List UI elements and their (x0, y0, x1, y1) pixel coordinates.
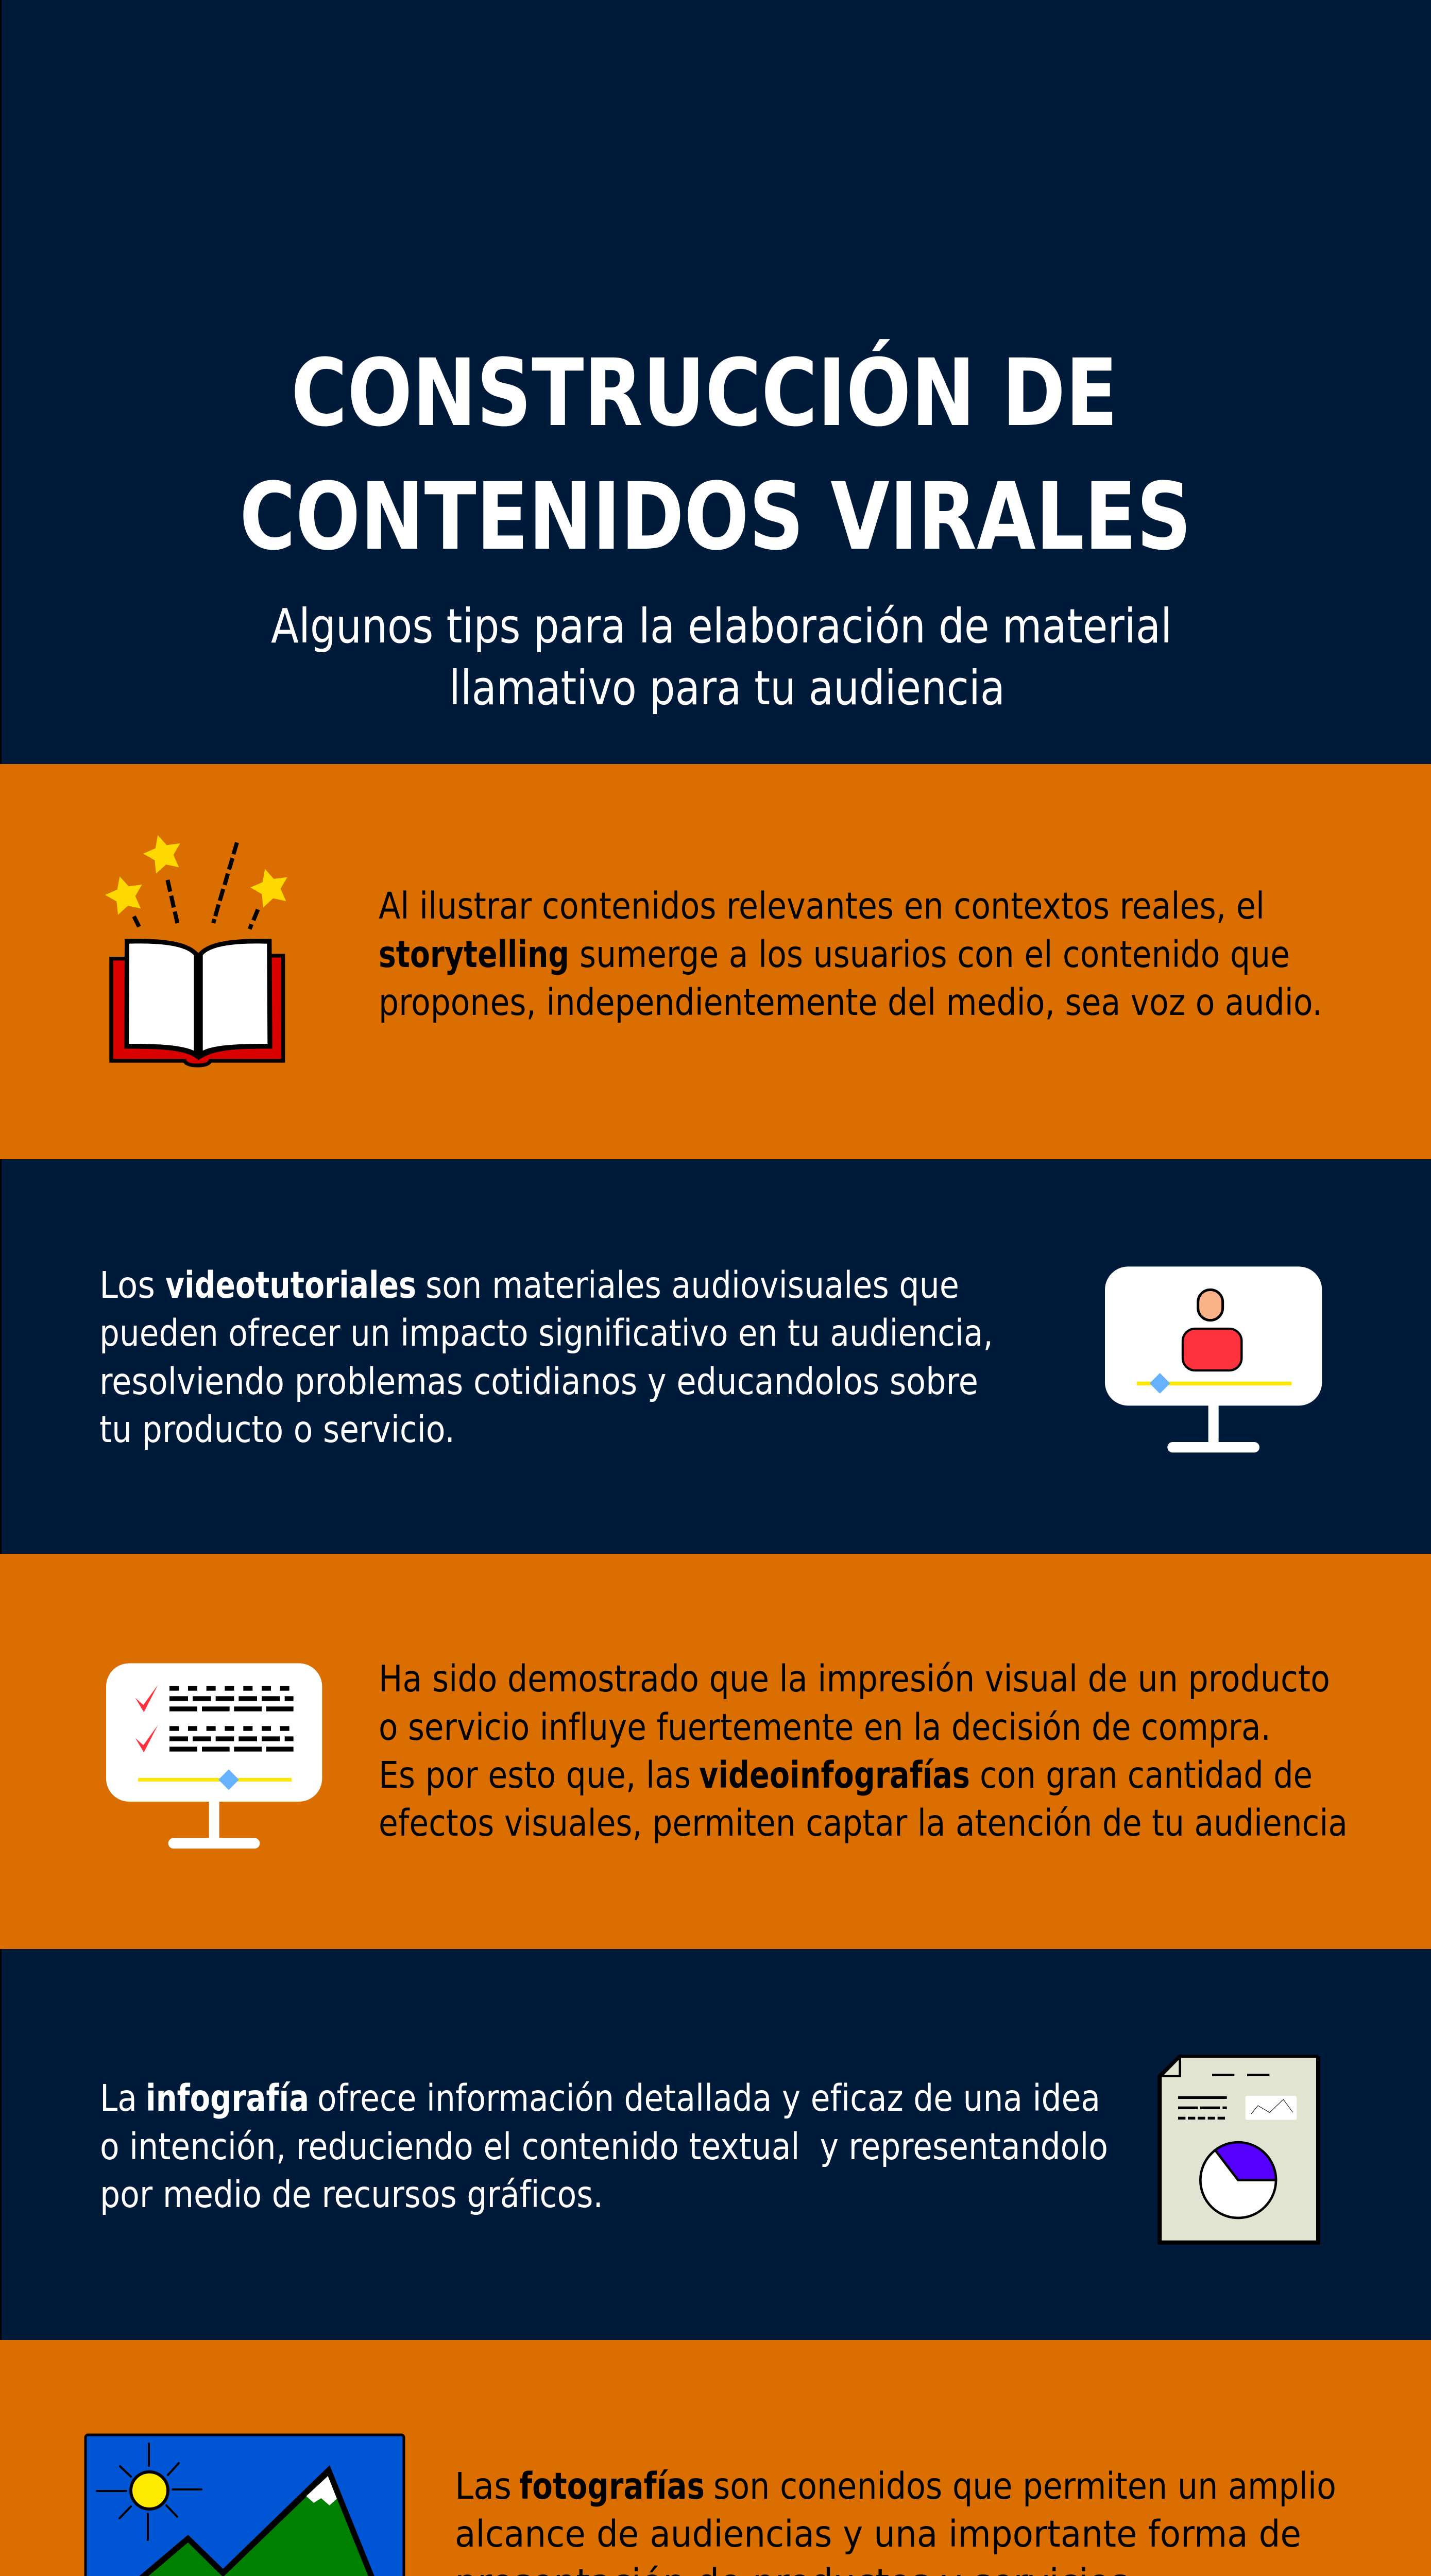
orange band (0, 764, 1431, 1159)
presenter (1183, 1290, 1241, 1370)
subtitle (271, 599, 1172, 716)
progress bar (138, 1769, 292, 1790)
subtitle: llamativo para tu audiencia (449, 660, 1005, 716)
text: videoinfografías (379, 1657, 1348, 1844)
title: CONTENIDOS VIRALES (240, 463, 1191, 571)
orange band (0, 2340, 1431, 2576)
text: storytelling: Al ilustrar contenidos relevantes en contextos reales, el (379, 885, 1265, 927)
text: videoinfografías: Es por esto que, las (379, 1754, 691, 1797)
pie chart (1200, 2142, 1276, 2218)
icon: monitor with presenter (1105, 1266, 1322, 1452)
text: videoinfografías: o servicio influye fuertemente en la decisión de compra. (379, 1706, 1271, 1749)
icon: open book with stars (105, 835, 287, 1065)
folded corner (1161, 2057, 1180, 2076)
panel: videotutoriales (0, 1159, 1431, 1554)
panel: header (0, 0, 1431, 764)
text: fotografías: son conenidos que permiten un amplio (713, 2465, 1336, 2507)
text: videotutoriales: Los (99, 1264, 155, 1307)
title (240, 339, 1191, 571)
text: storytelling: sumerge a los usuarios con el contenido que (580, 933, 1290, 976)
text: videotutoriales: resolviendo problemas cotidianos y educandolos sobre (99, 1360, 978, 1403)
mountains (108, 2465, 385, 2576)
line chart (1246, 2096, 1297, 2120)
icon: monitor with checklist (106, 1663, 322, 1849)
text: infografía: ofrece información detallada y eficaz de una idea (317, 2077, 1100, 2120)
monitor (1105, 1266, 1322, 1452)
text: videotutoriales: tu producto o servicio. (99, 1408, 455, 1451)
panel: storytelling (0, 764, 1431, 1159)
text: infografía: por medio de recursos gráficos. (100, 2173, 603, 2216)
text: fotografías: Las (455, 2465, 512, 2507)
text: videoinfografías: con gran cantidad de (980, 1754, 1313, 1797)
checkmarks (135, 1685, 158, 1752)
monitor (106, 1663, 322, 1849)
text: videotutoriales: pueden ofrecer un impacto significativo en tu audiencia, (99, 1312, 993, 1354)
subtitle: Algunos tips para la elaboración de material (271, 599, 1172, 654)
text: infografía: infografía (146, 2077, 309, 2120)
panel: fotografías (0, 2340, 1431, 2576)
icon: landscape photo (86, 2435, 404, 2576)
text: fotografías: alcance de audiencias y una importante forma de (455, 2513, 1301, 2555)
text: videotutoriales (99, 1264, 993, 1451)
progress bar (1137, 1373, 1291, 1394)
text: fotografías (455, 2465, 1336, 2576)
left edge line (0, 0, 2, 2576)
text: videotutoriales: son materiales audiovisuales que (425, 1264, 959, 1307)
text: storytelling: storytelling (379, 933, 569, 976)
orange band (0, 1554, 1431, 1949)
title: CONSTRUCCIÓN DE (291, 339, 1118, 447)
text: infografía (100, 2077, 1108, 2216)
header band (0, 0, 1431, 764)
text: infografía: La (100, 2077, 137, 2120)
text: fotografías: fotografías (519, 2465, 705, 2507)
text: infografía: o intención, reduciendo el contenido textual y representandolo (100, 2125, 1108, 2168)
panel: videoinfografías (0, 1554, 1431, 1949)
photo frame (86, 2435, 404, 2576)
checklist lines (169, 1686, 294, 1752)
stars (105, 835, 287, 915)
text: videoinfografías: videoinfografías (699, 1754, 970, 1797)
book cover (111, 956, 283, 1065)
text lines (1178, 2074, 1269, 2120)
panel: infografía (0, 1949, 1431, 2340)
icon: document with charts (1157, 2055, 1320, 2245)
sun (97, 2444, 201, 2540)
sheet (1157, 2055, 1320, 2245)
sparkle dashes (134, 842, 258, 929)
book pages (124, 939, 272, 1060)
navy band (0, 1159, 1431, 1554)
navy band (0, 1949, 1431, 2340)
text: storytelling (379, 885, 1322, 1024)
text: videotutoriales: videotutoriales (165, 1264, 416, 1307)
